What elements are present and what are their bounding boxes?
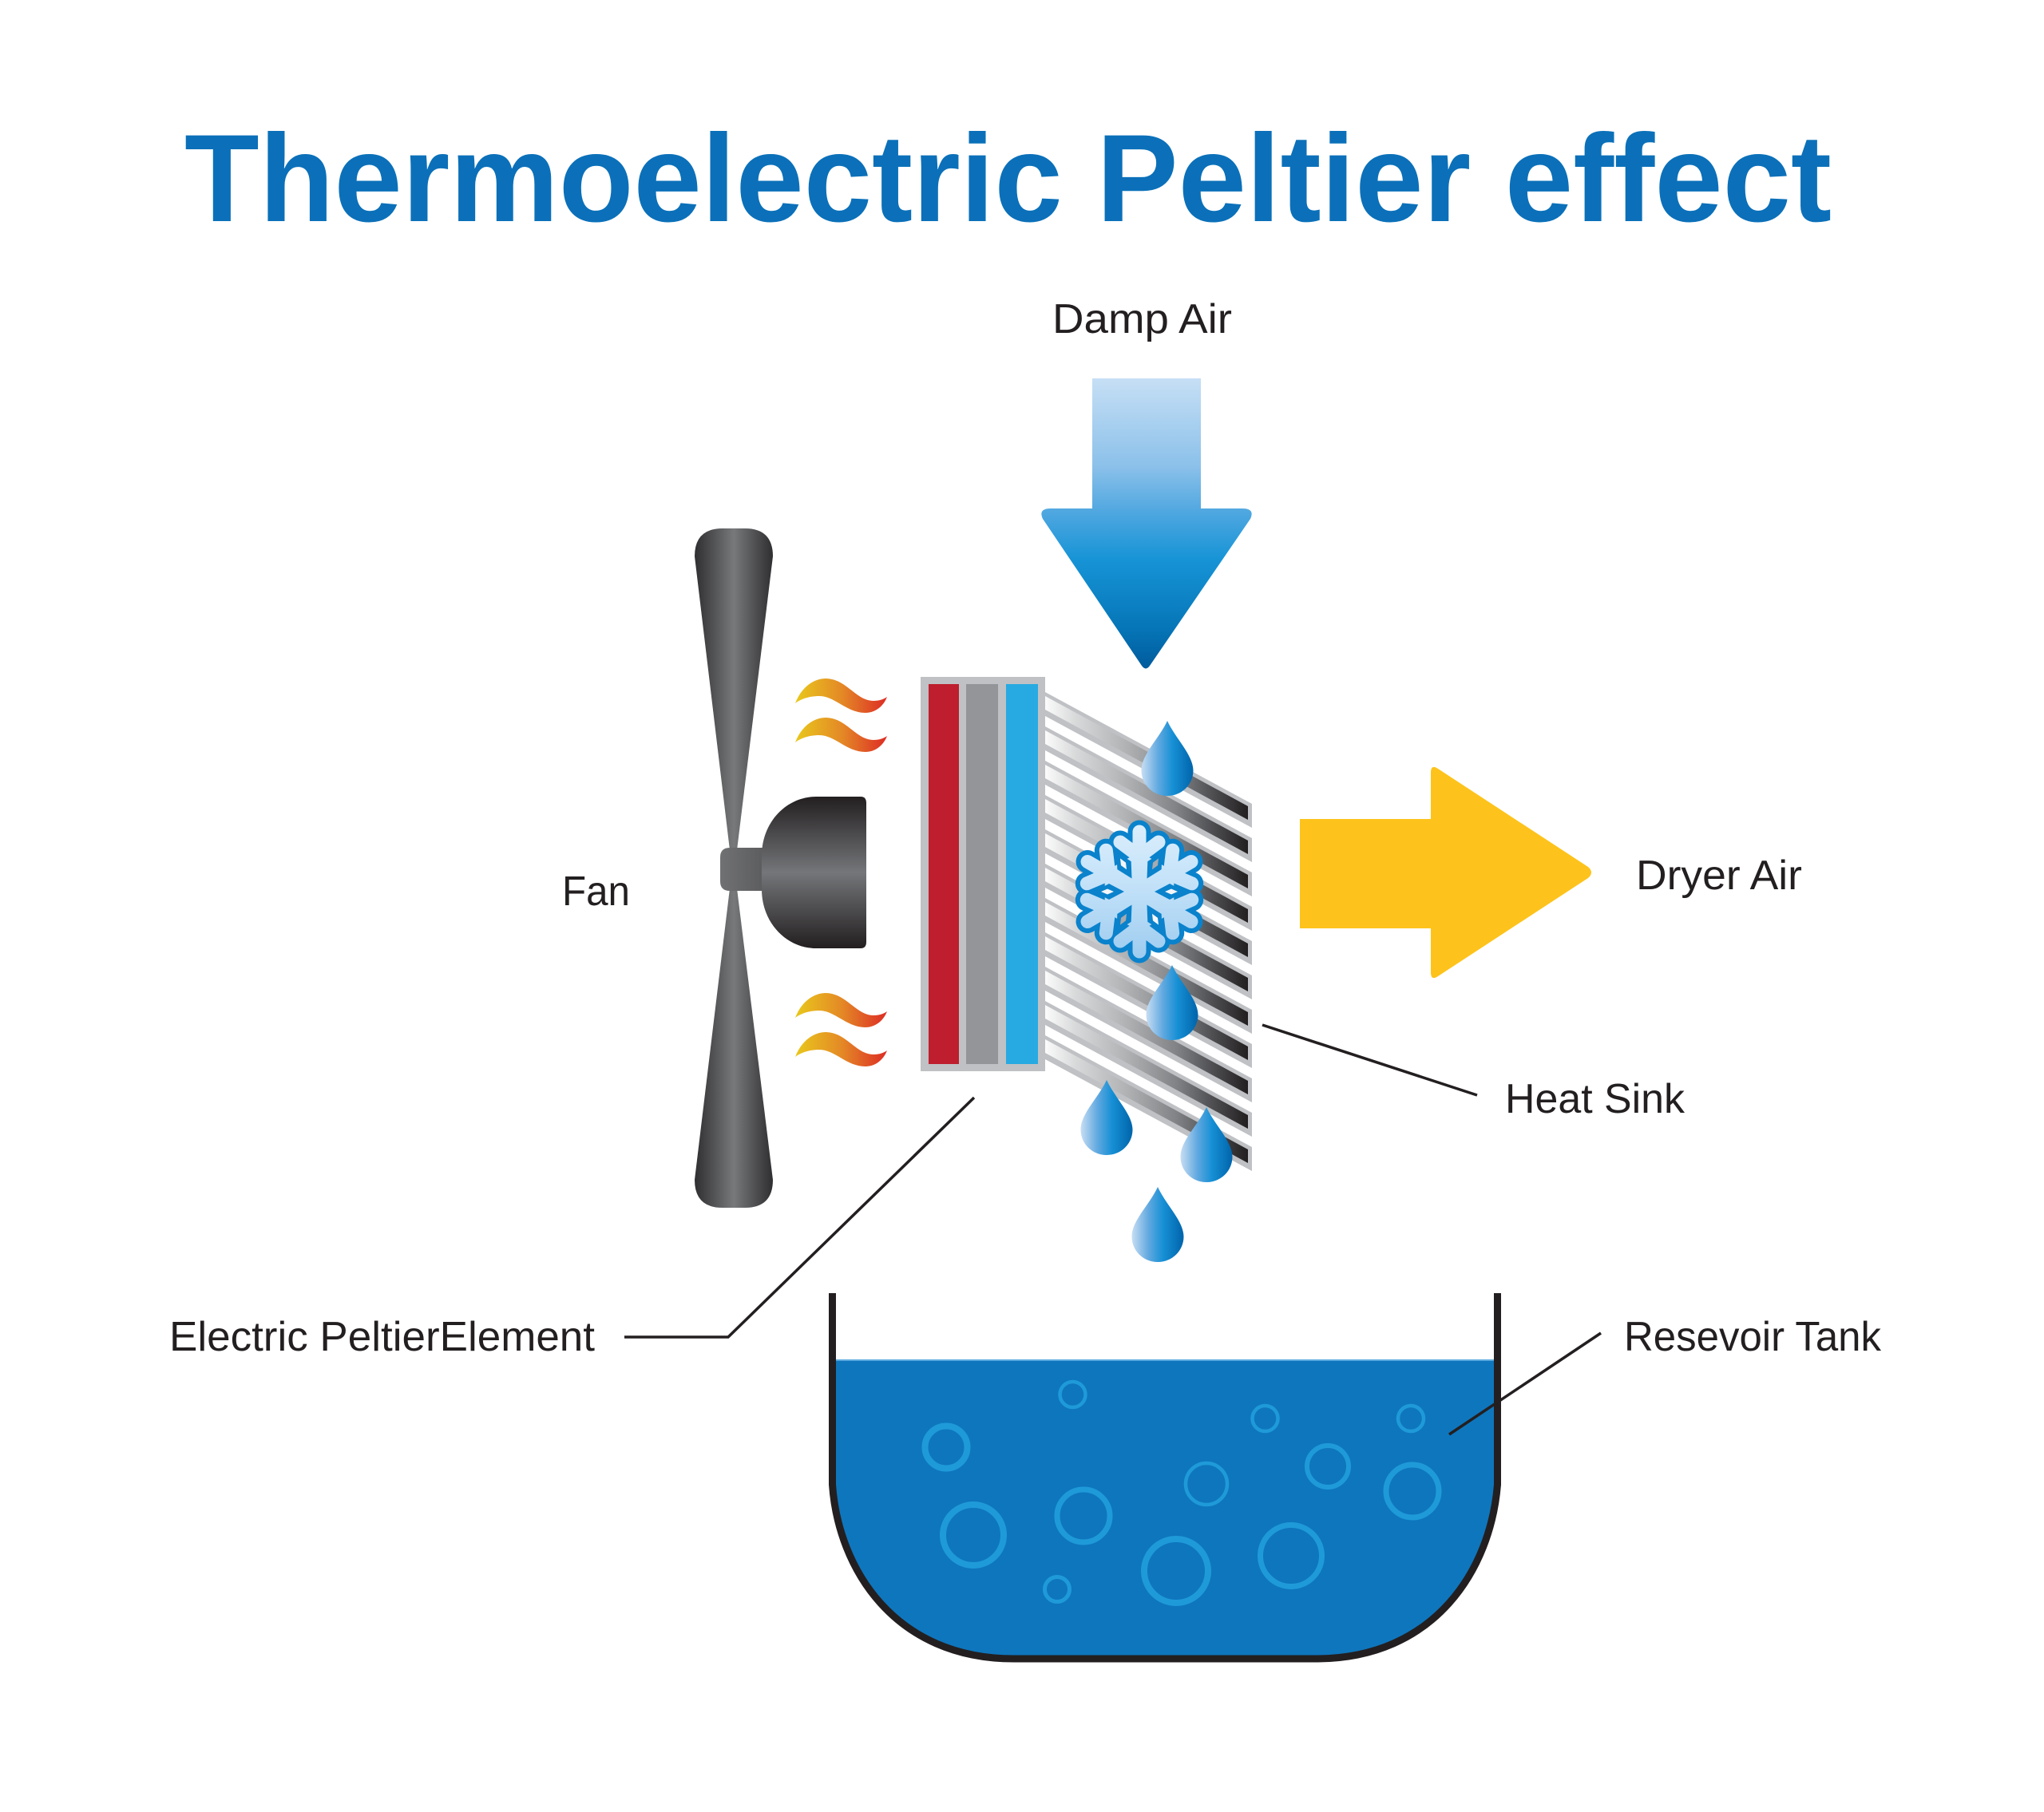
- cold plate: [1006, 684, 1038, 1064]
- water surface highlight: [836, 1359, 1494, 1361]
- title: Thermoelectric Peltier effect: [184, 109, 1832, 248]
- icon: snowflake: [1087, 832, 1192, 951]
- hot plate: [929, 684, 959, 1064]
- label: Electric PeltierElement: Electric PeltierElement: [169, 1314, 596, 1360]
- tank outline: [832, 1293, 1498, 1659]
- label: Fan: Fan: [562, 868, 630, 915]
- arrow: damp air flowing down: [1041, 378, 1252, 669]
- middle plate: [966, 684, 998, 1064]
- water: [832, 1360, 1498, 1659]
- leader line: Peltier element: [624, 1098, 974, 1337]
- water drop 5: [1132, 1187, 1183, 1262]
- water drop 2: [1147, 965, 1198, 1040]
- icon: upper heat waves: [795, 679, 887, 752]
- arrow: dryer air flowing right: [1300, 767, 1591, 978]
- icon: fan: [695, 528, 866, 1208]
- label: Resevoir Tank: Resevoir Tank: [1624, 1314, 1882, 1360]
- heat sink fins: [1045, 692, 1252, 1171]
- water drop 3: [1081, 1080, 1132, 1155]
- fan lower blade: [695, 888, 773, 1208]
- bubbles: [925, 1382, 1439, 1603]
- frame: [921, 677, 1045, 1071]
- icon: lower heat waves: [795, 993, 887, 1066]
- leader line: heat sink: [1262, 1025, 1477, 1095]
- Peltier element: [921, 677, 1045, 1071]
- water drop 4: [1180, 1107, 1233, 1182]
- reservoir tank: [832, 1293, 1498, 1659]
- label: Dryer Air: Dryer Air: [1636, 853, 1802, 899]
- water drop 1: [1142, 721, 1193, 796]
- leader line: reservoir tank: [1449, 1333, 1601, 1434]
- fan upper blade: [695, 528, 773, 850]
- fan hub: [720, 848, 763, 891]
- label: Damp Air: Damp Air: [1052, 296, 1232, 342]
- fan motor: [762, 797, 866, 948]
- label: Heat Sink: Heat Sink: [1505, 1076, 1686, 1122]
